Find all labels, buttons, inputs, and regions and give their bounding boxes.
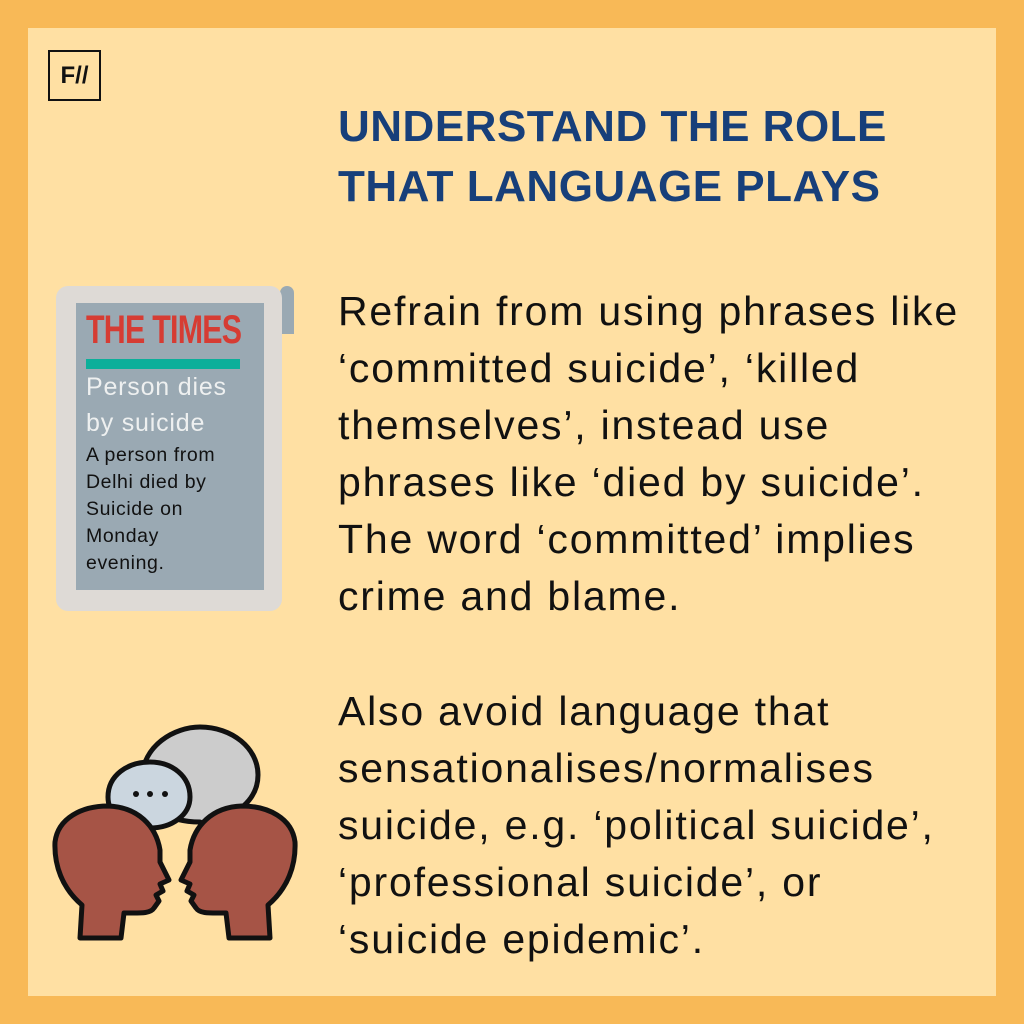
text block: avoid: ‘professional suicide’, or — [338, 859, 822, 905]
title — [338, 102, 887, 211]
icon: newspaper: Person dies — [86, 373, 227, 401]
icon: newspaper: Suicide on — [86, 498, 183, 520]
icon: newspaper: A person from — [86, 444, 215, 466]
text block: avoid — [338, 688, 935, 962]
text block: avoid: sensationalises/normalises — [338, 745, 875, 791]
text block: refrain: phrases like ‘died by suicide’. — [338, 459, 925, 505]
logo: F// — [60, 62, 88, 89]
text block: refrain: themselves’, instead use — [338, 402, 830, 448]
text block: refrain — [338, 288, 959, 619]
icon: newspaper: THE TIMES — [86, 308, 241, 352]
icon: newspaper: by suicide — [86, 409, 205, 437]
text block: refrain: The word ‘committed’ implies — [338, 516, 915, 562]
icon: newspaper — [56, 286, 294, 611]
text block: avoid: Also avoid language that — [338, 688, 830, 734]
text block: refrain: Refrain from using phrases like — [338, 288, 959, 334]
logo — [48, 50, 101, 101]
title: UNDERSTAND THE ROLE — [338, 102, 887, 151]
text block: avoid: ‘suicide epidemic’. — [338, 916, 705, 962]
icon: newspaper: evening. — [86, 552, 165, 574]
text block: refrain: ‘committed suicide’, ‘killed — [338, 345, 860, 391]
text block: refrain: crime and blame. — [338, 573, 681, 619]
icon: newspaper: Delhi died by — [86, 471, 207, 493]
text block: avoid: suicide, e.g. ‘political suicide’, — [338, 802, 935, 848]
title: THAT LANGUAGE PLAYS — [338, 162, 880, 211]
icon: newspaper: Monday — [86, 525, 159, 547]
